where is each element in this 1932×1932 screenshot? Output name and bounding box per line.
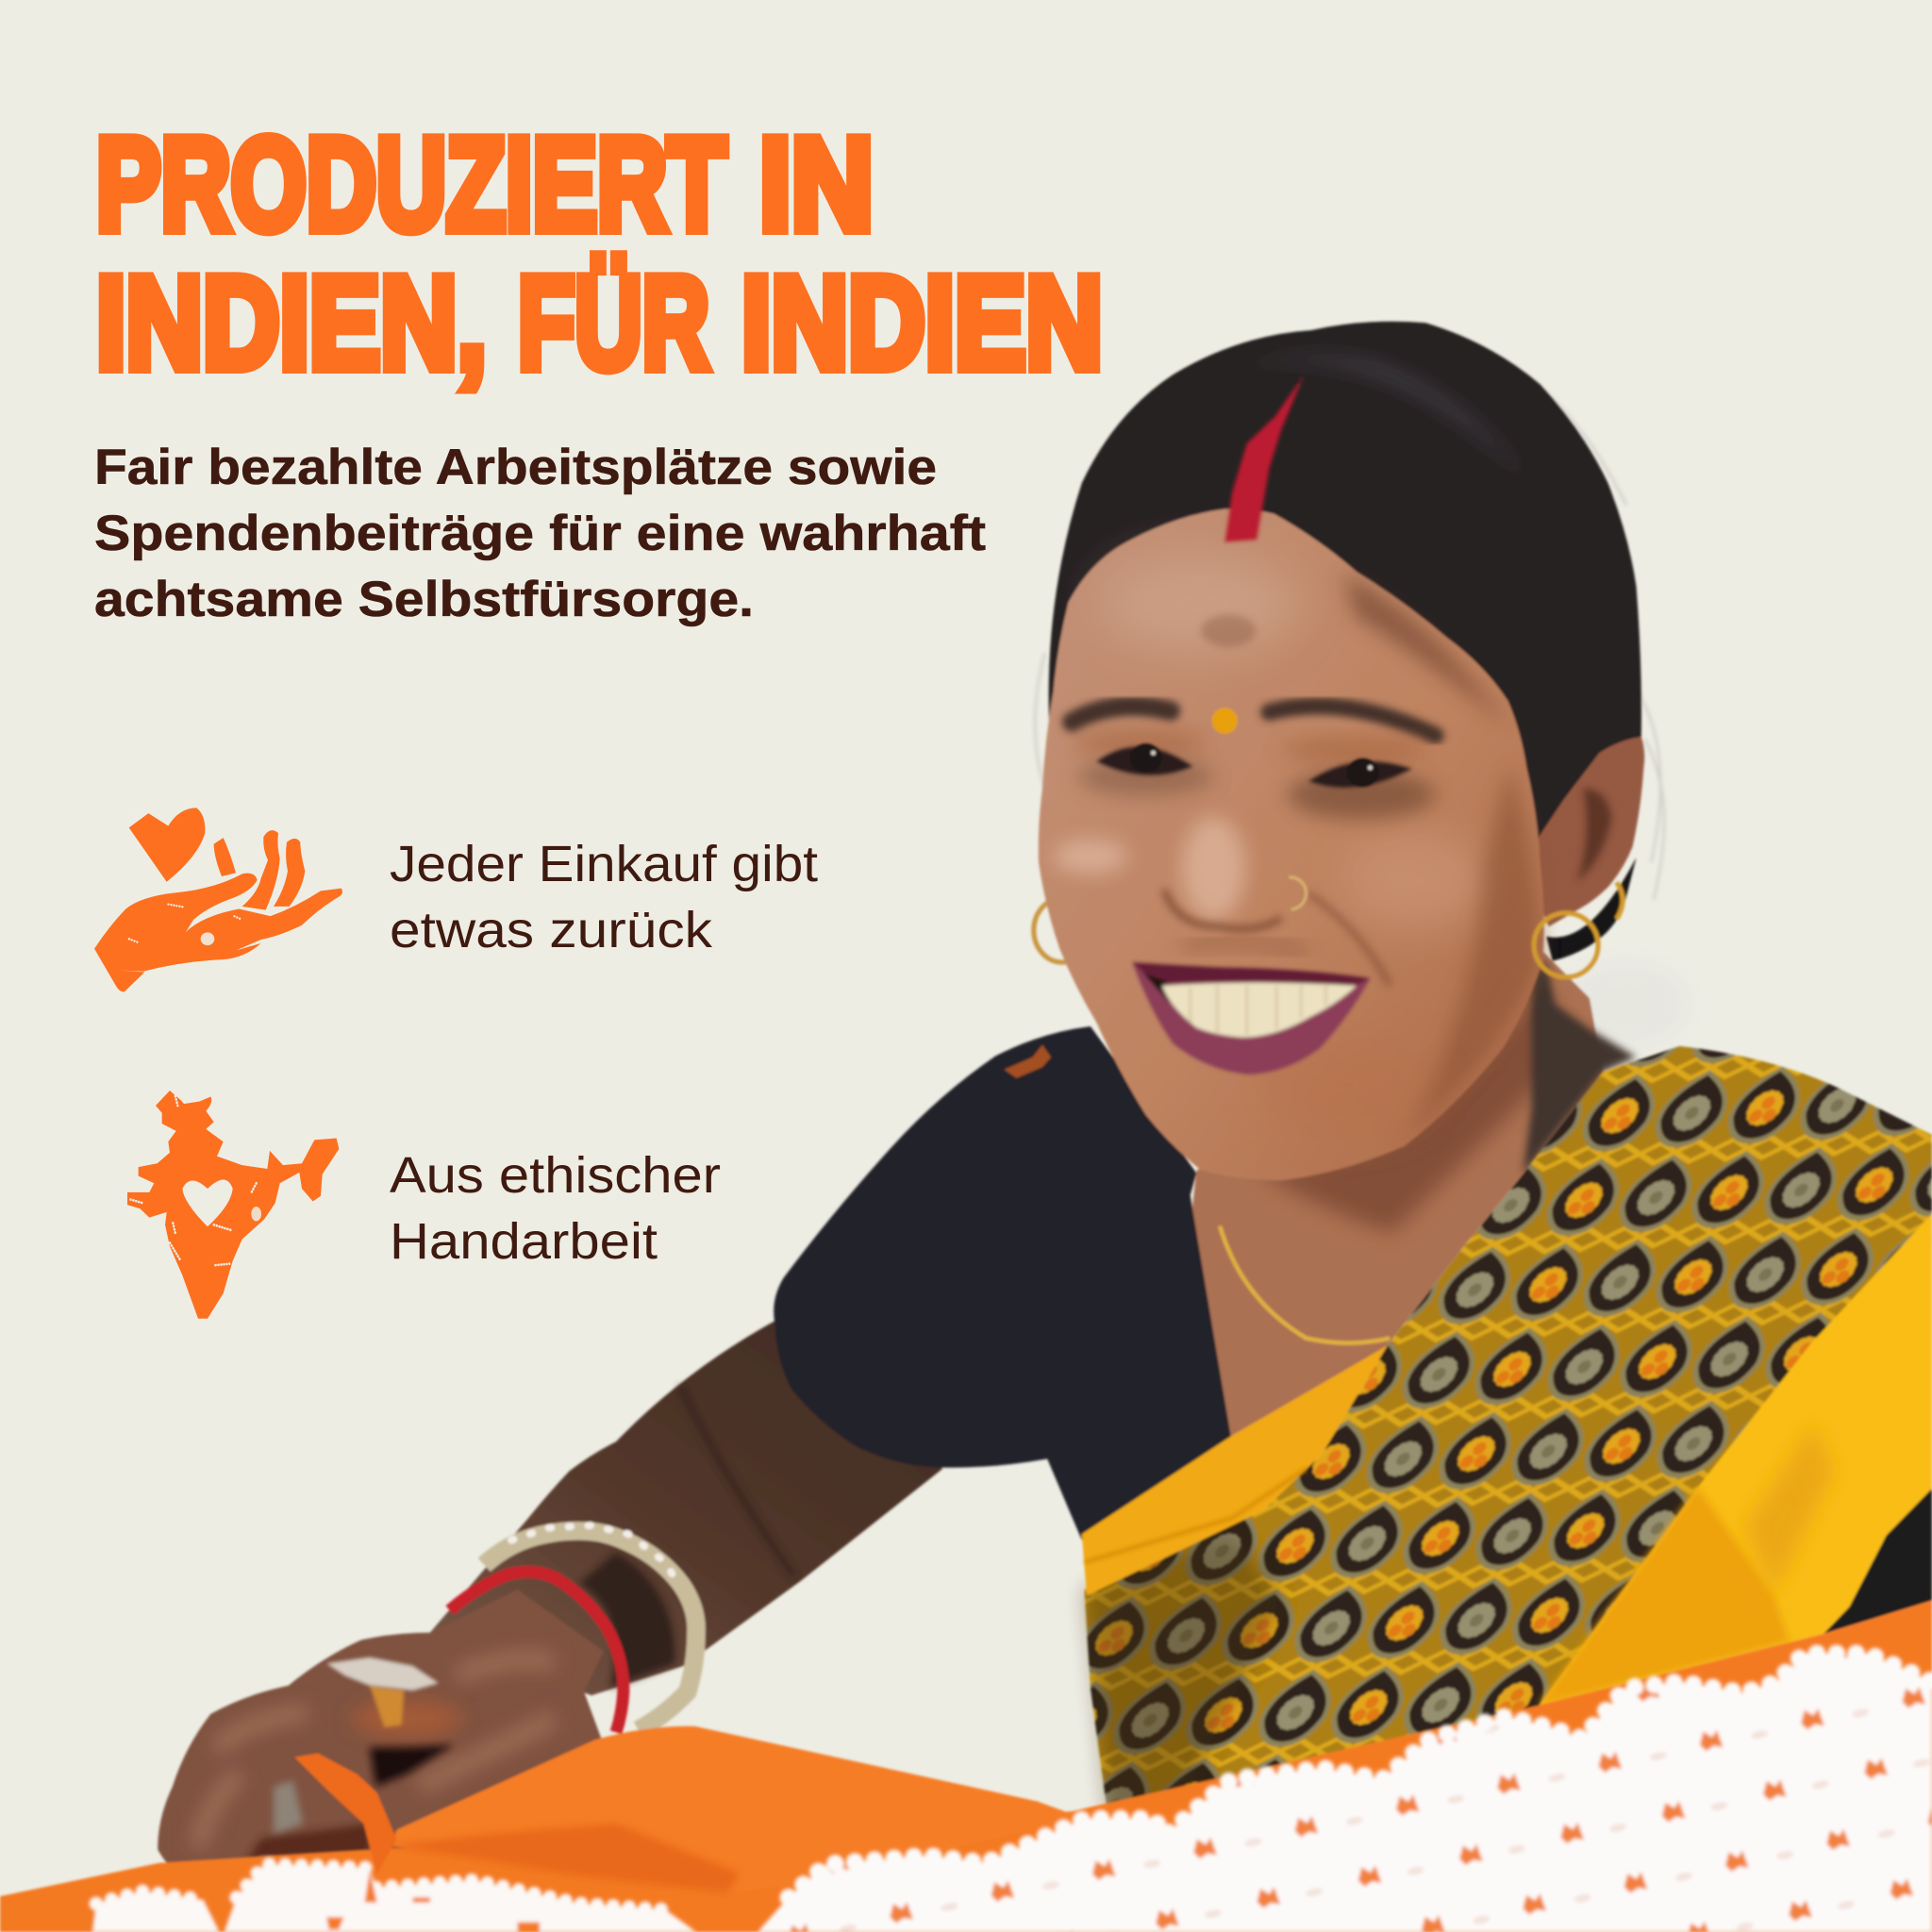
eye shadow right: [1288, 770, 1436, 820]
blouse stain: [1004, 1045, 1051, 1078]
ring stone: [326, 1657, 439, 1690]
hair wisps: [1035, 351, 1664, 899]
red bangle: [450, 1572, 624, 1732]
gap between fingers: [370, 1744, 454, 1787]
eyes: [1096, 743, 1412, 788]
feature text: ethical handcraft: Handarbeit: [390, 1213, 658, 1270]
cloth base orange: [0, 1601, 1932, 1932]
ring band: [370, 1686, 404, 1727]
pale halo behind neck: [1565, 962, 1688, 1046]
underside shadow: [246, 1824, 370, 1860]
arm: [430, 1313, 942, 1695]
sari yellow band right: [1539, 1214, 1932, 1706]
icon: map of India with heart: [127, 1091, 339, 1319]
title: PRODUZIERT: [96, 111, 726, 258]
hair at nape: [1523, 961, 1637, 1174]
hair sheen: [1232, 356, 1528, 480]
cheek tone right: [1343, 832, 1491, 930]
knuckle highlights: [197, 1659, 555, 1848]
eyelid tone right: [1281, 737, 1429, 761]
facial shading: [1054, 555, 1541, 1140]
title: [96, 111, 1103, 396]
bindi: [1212, 708, 1238, 734]
jaw shadow right: [1405, 764, 1541, 1140]
cheek highlight left: [1054, 839, 1127, 874]
grey gap under finger: [274, 1780, 303, 1836]
hand: [158, 1590, 610, 1879]
intro text: [94, 440, 986, 627]
sari fold line: [1084, 1469, 1306, 1562]
smile line: [1308, 893, 1390, 986]
folded orange cloth: [391, 1726, 1084, 1892]
icon: hand with heart: [94, 808, 342, 992]
eyebrows: [1072, 706, 1436, 736]
forehead hairline shadow: [1343, 573, 1509, 727]
cloth loop: [294, 1754, 397, 1874]
right earring: [1534, 882, 1623, 977]
title: IN: [759, 111, 874, 258]
neck and chest: [1187, 949, 1603, 1454]
title: FÜR: [518, 250, 709, 396]
feature text: every purchase gives back: [390, 836, 818, 958]
sari lower-left shading: [1084, 1528, 1281, 1824]
bangle sparkles: [511, 1525, 677, 1583]
hair: [1049, 322, 1641, 850]
intro text: achtsame Selbstfürsorge.: [94, 572, 754, 627]
brow spot: [1201, 615, 1256, 647]
mouth: [1132, 962, 1370, 1074]
lace trim left: [92, 1864, 696, 1932]
intro text: Fair bezahlte Arbeitsplätze sowie: [94, 440, 937, 495]
ear inner shadow: [1577, 789, 1611, 881]
neck shadow: [1257, 986, 1577, 1232]
lace trim right: [758, 1654, 1932, 1932]
sari yellow border left: [1082, 1345, 1388, 1595]
eyelid tone left: [1072, 729, 1208, 754]
nose ring: [1289, 877, 1307, 909]
necklace: [1220, 1226, 1390, 1343]
face: [1039, 508, 1544, 1180]
feature text: ethical handcraft: [390, 1147, 721, 1270]
title: INDIEN,: [96, 250, 487, 396]
hair behind earring: [1546, 858, 1637, 961]
feature text: every purchase gives back: etwas zurück: [390, 902, 713, 958]
white bangle: [484, 1531, 696, 1730]
title: INDIEN: [741, 250, 1103, 396]
dark garment corner: [1824, 1489, 1932, 1634]
sindoor stripe: [1224, 375, 1304, 542]
lower cheek warmth: [1257, 1035, 1429, 1134]
feature text: ethical handcraft: Aus ethischer: [390, 1147, 721, 1204]
upper lip shadow: [1183, 941, 1306, 953]
feature text: every purchase gives back: Jeder Einkauf gibt: [390, 836, 818, 892]
sari band shading middle: [1746, 1424, 1834, 1594]
intro text: Spendenbeiträge für eine wahrhaft: [94, 506, 986, 561]
warm finger tone: [351, 1699, 462, 1739]
arm inner shadow near bangle: [579, 1553, 675, 1688]
left earring: [1034, 898, 1091, 962]
right ear: [1522, 737, 1644, 926]
eye shadow left: [1078, 757, 1214, 796]
sari band shading lower: [1539, 1487, 1789, 1706]
arm crease: [680, 1386, 794, 1577]
nose: [1164, 817, 1390, 986]
blouse: [774, 1026, 1232, 1541]
sari patterned drape: [1084, 1046, 1932, 1824]
forehead highlight: [1103, 555, 1300, 653]
